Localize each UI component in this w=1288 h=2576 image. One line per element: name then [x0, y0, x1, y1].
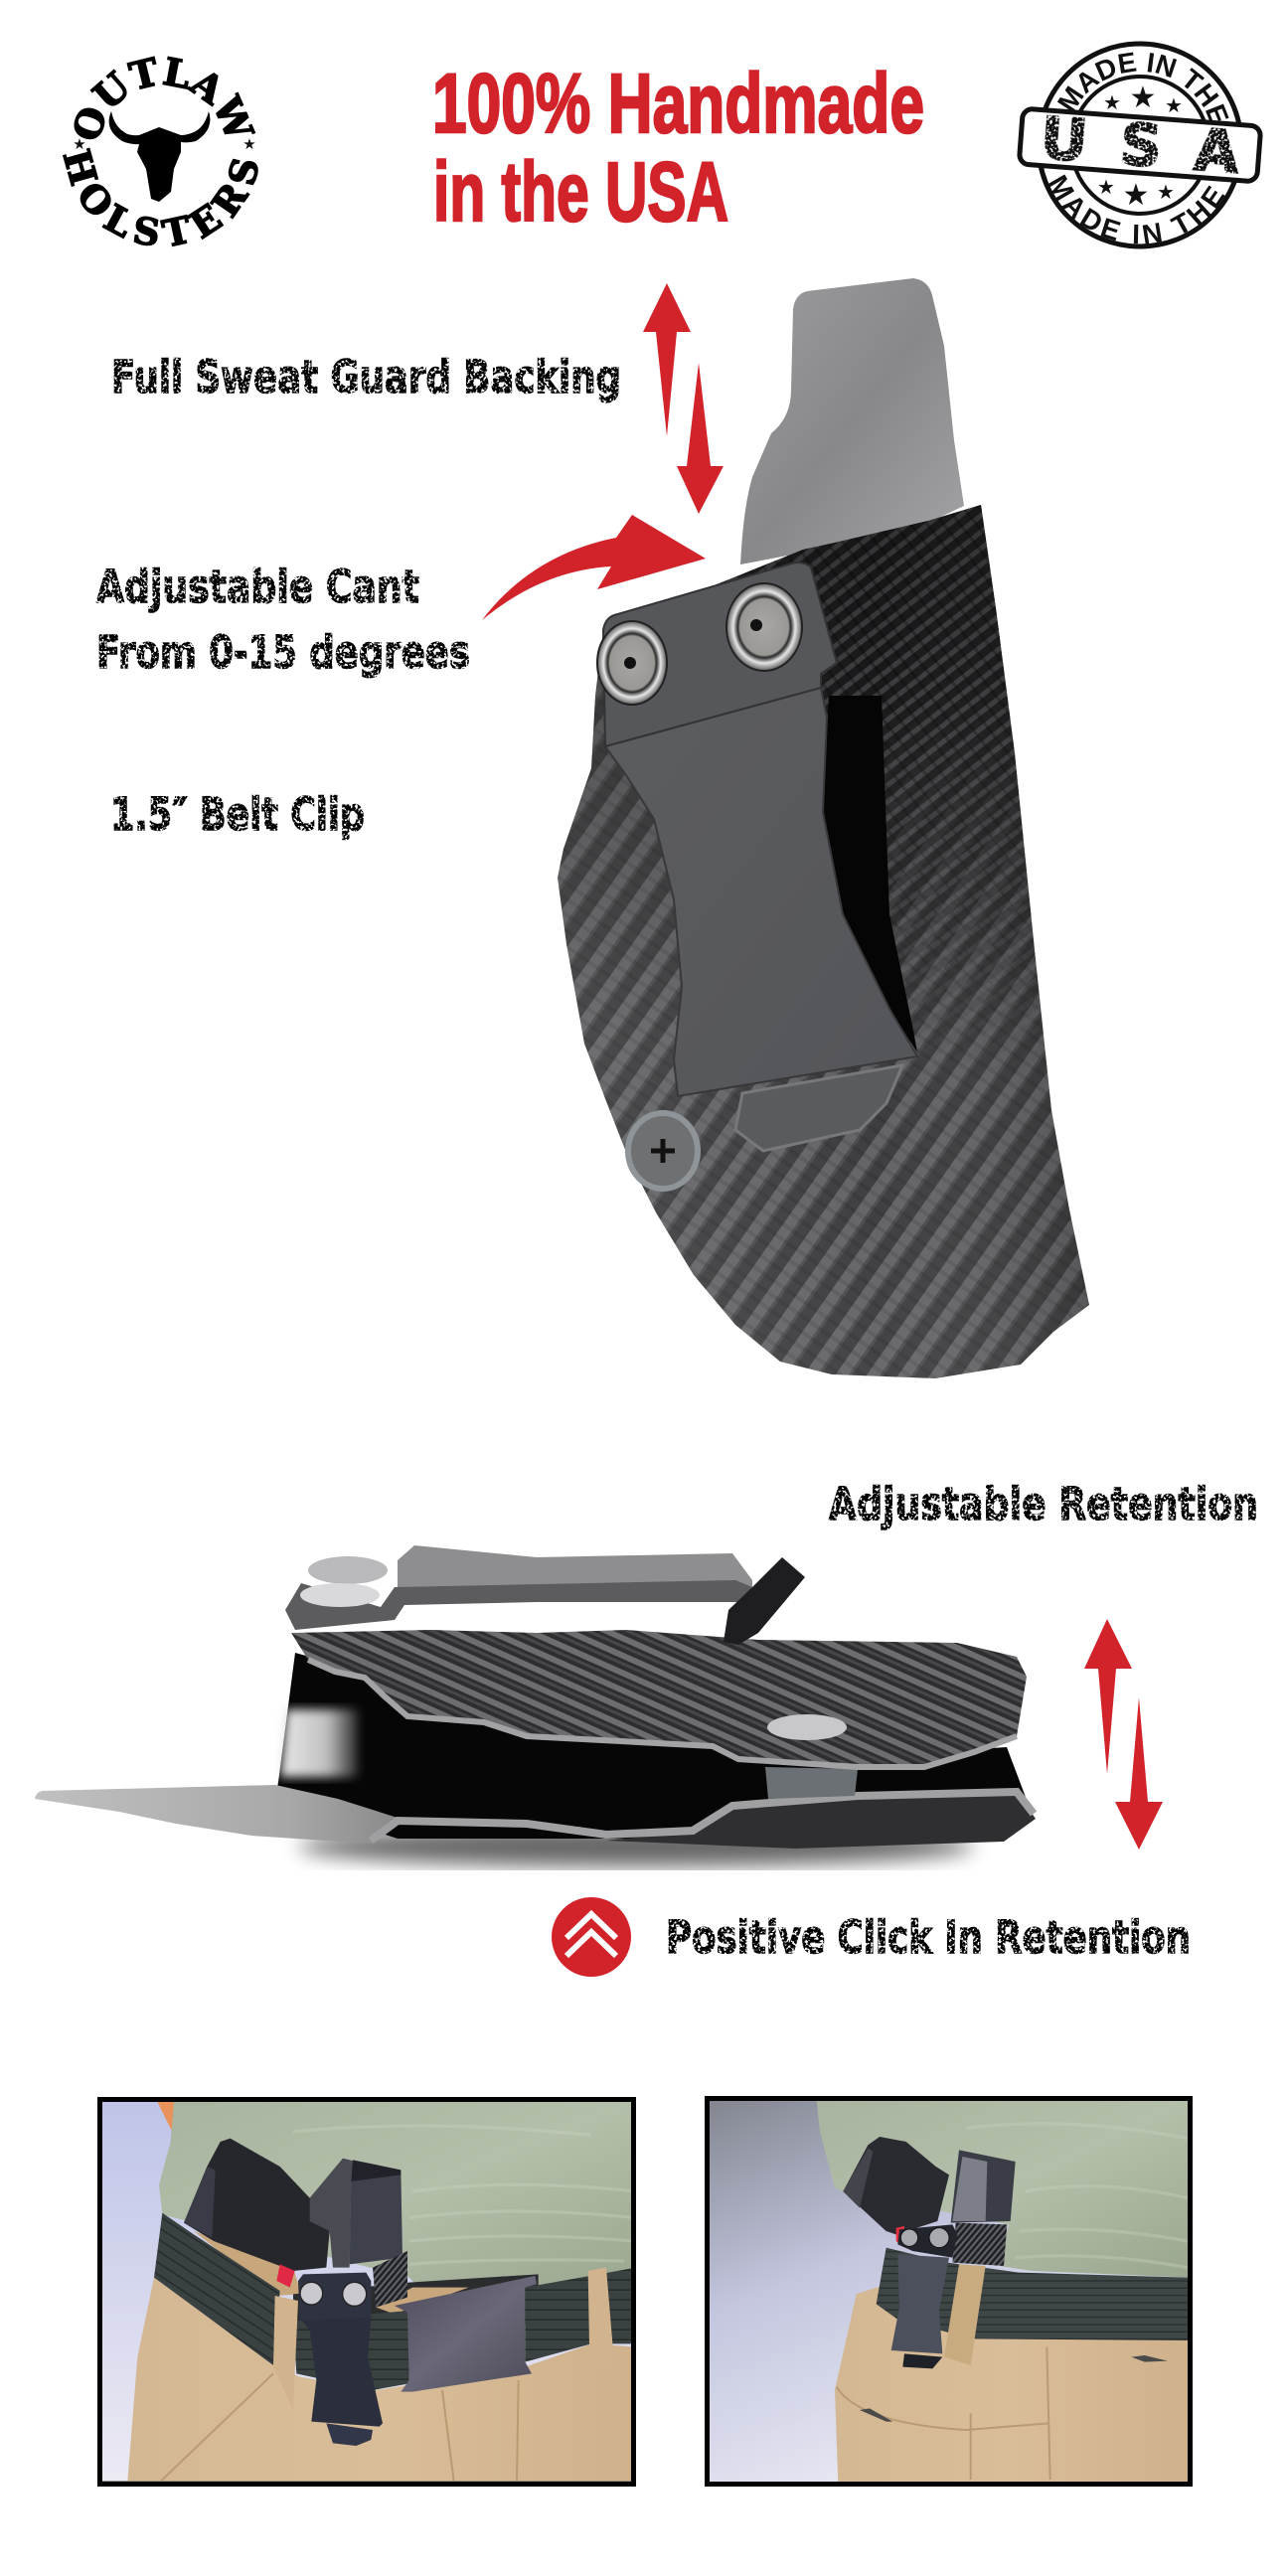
stamp outer ring: [1039, 44, 1241, 246]
pistol grip: [184, 2139, 330, 2271]
photo contents: [708, 2099, 1191, 2483]
screw left: [300, 2282, 323, 2305]
belt clip body: [605, 688, 917, 1096]
holster carbon: [952, 2223, 1007, 2266]
arrow: retention down: [1115, 1697, 1163, 1850]
icon: left star: ★: [73, 135, 86, 153]
upper shell rim: [308, 1660, 1017, 1767]
trousers: [835, 2288, 1191, 2483]
lower chevron: [566, 1932, 616, 1956]
belt right section: [525, 2268, 636, 2362]
screw right: [929, 2228, 949, 2248]
pistol slide: [350, 2170, 402, 2264]
left belt loop: [273, 2296, 298, 2410]
screw left: [900, 2229, 918, 2246]
star top right: ★: [1165, 93, 1183, 117]
holster carbon band: [373, 2251, 407, 2308]
cant line 1: Adjustable Cant: [96, 561, 419, 613]
arrow: retention up: [1084, 1619, 1132, 1774]
title: [432, 57, 924, 239]
shirt: [159, 2102, 636, 2294]
fine carbon weave upper right: [716, 505, 1044, 1046]
star bottom centre: ★: [1123, 178, 1149, 213]
magazine base: [184, 2167, 216, 2238]
clip hook: [735, 1065, 902, 1151]
trousers: [127, 2278, 636, 2482]
orange strap: [157, 2102, 174, 2132]
clip body: [891, 2254, 949, 2353]
badge circle: [552, 1897, 631, 1977]
screw: upper right of plate: [726, 583, 802, 671]
holster main view: [547, 278, 1103, 1391]
sweat guard backing: [740, 278, 964, 564]
screw: lower left of plate: [597, 621, 667, 705]
slide top: [351, 2160, 401, 2181]
phillips cross: [651, 1139, 675, 1163]
screw right: [343, 2282, 367, 2306]
screw: adjustment: [767, 1714, 847, 1740]
carbon fibre shell: [547, 497, 1103, 1391]
pistol frame: [310, 2159, 356, 2268]
stamp USA band: USA: [1039, 104, 1241, 186]
dark gap behind buckle: [293, 2274, 539, 2331]
red tab: [896, 2226, 904, 2248]
screw: bottom phillips: [628, 1113, 698, 1189]
holster side view: [35, 1545, 1044, 1866]
socket: upper right: [750, 619, 762, 631]
icon: bull skull: [109, 111, 210, 202]
stamp inner ring: [1071, 77, 1208, 214]
backing highlight: [280, 1709, 358, 1777]
photo contents: [101, 2102, 636, 2482]
stamp top text: MADE IN THE: [1057, 52, 1228, 121]
retention post: [765, 1767, 858, 1799]
photo: side view worn: [705, 2096, 1193, 2487]
horizontal lighting: [558, 576, 1089, 1375]
magazine base: [843, 2149, 873, 2208]
tan lining under pistol: [194, 2231, 301, 2296]
badge: Made in the USA stamp: [1017, 42, 1263, 248]
photo frame: [97, 2097, 636, 2487]
red tab: [276, 2264, 295, 2288]
shirt: [817, 2100, 1191, 2278]
logo text: OUTLAW: OUTLAW: [74, 56, 256, 139]
photo: front view worn: [97, 2097, 636, 2487]
rear backing plate: [275, 1653, 1034, 1839]
clip hook: [724, 1557, 805, 1645]
pistol grip: [843, 2137, 949, 2234]
clip curved top: [398, 1545, 752, 1587]
lower backing strip: [35, 1785, 398, 1844]
backdrop: [101, 2102, 636, 2482]
cant line 2: From 0-15 degrees: [96, 626, 470, 679]
tan fold above buckle: [376, 2288, 469, 2314]
belt loop: [944, 2264, 986, 2365]
star bottom left: ★: [1097, 175, 1115, 199]
ground shadow: [298, 1827, 974, 1866]
arrow: sweat guard up: [643, 283, 691, 436]
belt clip mounting plate: [603, 563, 837, 746]
callout: Full Sweat Guard Backing: Full Sweat Guard Backing: [111, 351, 621, 403]
trouser fly seams: [161, 2373, 519, 2482]
upper carbon shell: [291, 1630, 1027, 1764]
stamp bottom text: MADE IN THE: [1048, 175, 1224, 244]
carbon weave: [547, 497, 1103, 1391]
upper chevron: [566, 1914, 616, 1938]
backdrop: [708, 2099, 1191, 2483]
icon: red chevron badge: [552, 1897, 631, 1977]
arrow: sweat guard down: [677, 363, 724, 514]
belt: [877, 2248, 1191, 2340]
shirt folds: [293, 2126, 636, 2264]
star top centre: ★: [1130, 80, 1156, 115]
right belt loop: [588, 2268, 612, 2345]
pistol slide: [951, 2150, 1016, 2223]
clip front band: [285, 1580, 752, 1630]
clip hook: [326, 2423, 373, 2446]
belt left section: [154, 2213, 280, 2365]
dark opening: [823, 696, 917, 1052]
title line 2: in the USA: [433, 145, 728, 239]
shirt folds: [966, 2124, 1188, 2268]
arrow: curved cant arrow: [482, 515, 706, 620]
star top left: ★: [1103, 90, 1121, 114]
photo frame: [705, 2096, 1193, 2487]
slide serrations: [952, 2157, 987, 2221]
title line 1: 100% Handmade: [432, 57, 924, 150]
callout: belt clip: 1.5″ Belt Clip: [110, 788, 365, 841]
screw: lower: [300, 1583, 380, 1607]
lower silver rim: [371, 1792, 1034, 1841]
clip hook: [902, 2353, 942, 2368]
pocket seam: [837, 2347, 1050, 2480]
vertical lighting: [558, 505, 1032, 958]
logo: Outlaw Holsters: [62, 56, 258, 246]
pocket rivet: [860, 2408, 892, 2422]
clip plate: [897, 2224, 957, 2258]
lower carbon edge: [606, 1792, 1036, 1849]
grey belt plate: [395, 2276, 537, 2392]
logo text: HOLSTERS: HOLSTERS: [62, 147, 258, 246]
trouser tag: [1131, 2355, 1168, 2362]
clip body: [300, 2318, 383, 2427]
icon: right star: ★: [242, 135, 256, 153]
screw: upper: [308, 1556, 388, 1584]
callout: Adjustable Cant: [96, 561, 470, 679]
star bottom right: ★: [1157, 180, 1175, 204]
socket: lower left: [624, 657, 636, 669]
belt centre section: [293, 2311, 409, 2390]
clip plate: [298, 2273, 371, 2321]
